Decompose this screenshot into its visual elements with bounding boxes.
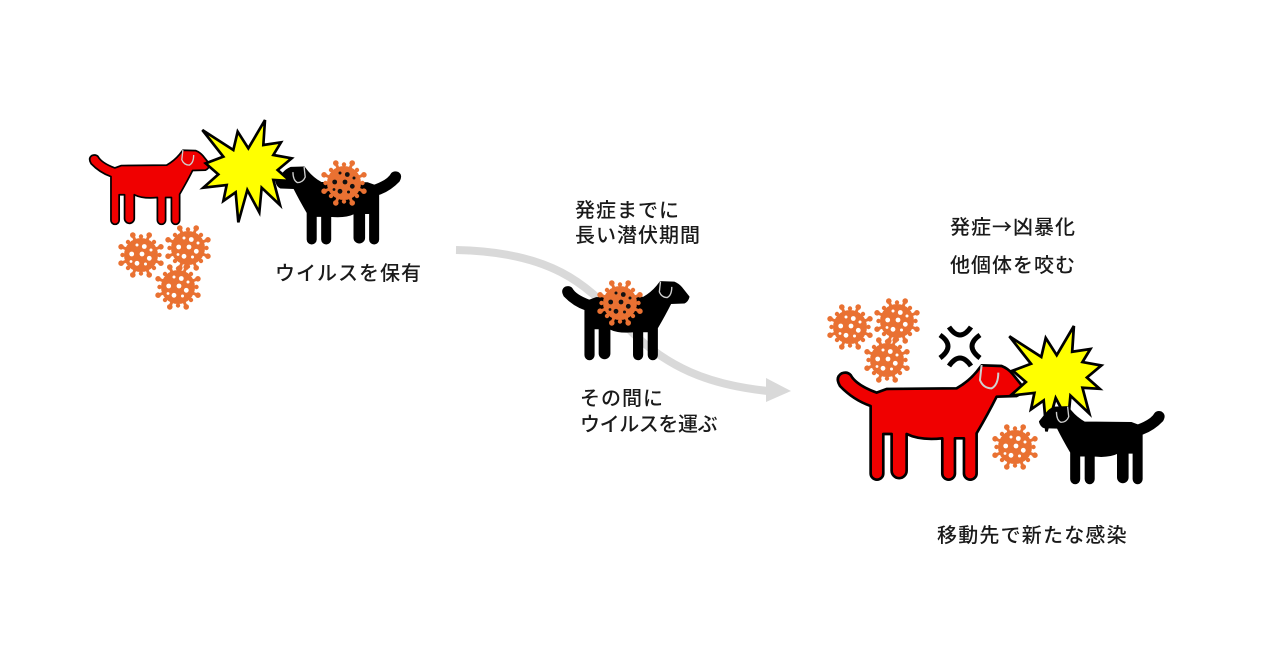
icon: anger mark bbox=[940, 327, 980, 366]
text: long incubation period: 発症までに bbox=[575, 199, 680, 222]
icon: bite burst bbox=[202, 120, 292, 222]
text: new infection at destination: 移動先で新たな感染 bbox=[937, 523, 1128, 547]
arrow: gray curved flow arrow bbox=[456, 250, 791, 402]
text: carries the virus meanwhile: その間に bbox=[580, 388, 664, 410]
text: onset and aggression bbox=[950, 211, 1076, 277]
text: long incubation period bbox=[575, 199, 701, 247]
panel: stage 1 biting and carrying virus bbox=[90, 120, 422, 310]
panel: stage 3 onset and new infection bbox=[827, 211, 1164, 547]
text: carries the virus meanwhile: ウイルスを運ぶ bbox=[580, 413, 718, 436]
panel: stage 2 incubation bbox=[563, 199, 718, 436]
icon: black dog carrying virus bbox=[563, 282, 689, 359]
icon: virus cluster bbox=[827, 298, 920, 383]
icon: small black dog bbox=[1040, 407, 1164, 483]
icon: virus cluster bbox=[118, 225, 211, 310]
icon: virus by dogs bbox=[992, 424, 1038, 470]
icon: virus on dog bbox=[597, 280, 643, 326]
text: onset and aggression: 発症→凶暴化 bbox=[950, 211, 1076, 240]
text: onset and aggression: 他個体を咬む bbox=[950, 254, 1076, 277]
icon: red infected dog bbox=[90, 150, 210, 224]
icon: black dog bbox=[276, 167, 400, 244]
icon: virus on black dog bbox=[321, 160, 367, 206]
text: long incubation period: 長い潜伏期間 bbox=[575, 224, 701, 247]
icon: big red dog bbox=[838, 365, 1023, 480]
icon: bite burst bbox=[1009, 326, 1101, 431]
text: carrying the virus: ウイルスを保有 bbox=[275, 262, 422, 285]
text: carries the virus meanwhile bbox=[580, 388, 718, 436]
